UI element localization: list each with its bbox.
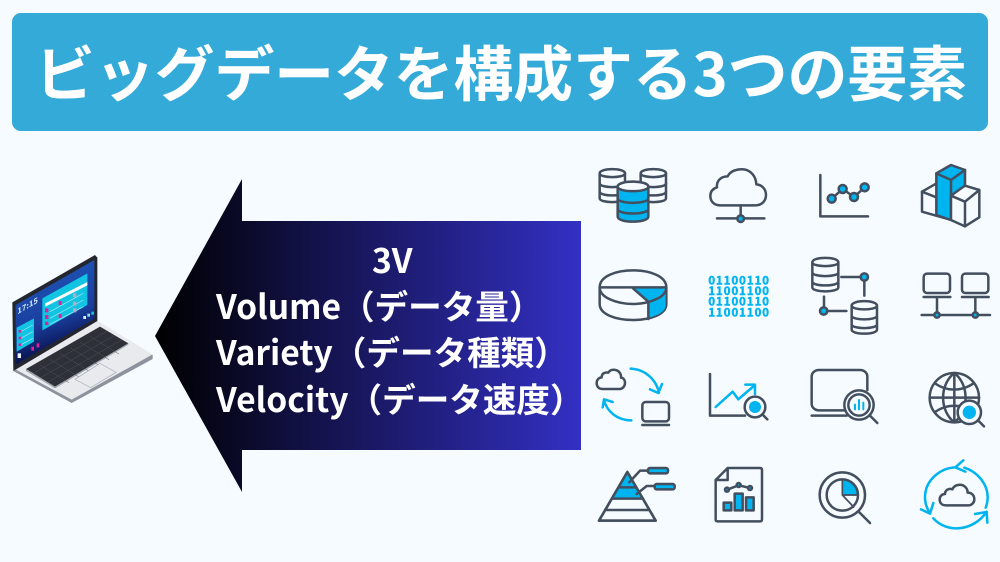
icon: network computers bbox=[922, 274, 990, 318]
icon: cloud cycle bbox=[921, 460, 988, 528]
icon: databases bbox=[600, 169, 666, 222]
icon: report document bbox=[716, 468, 762, 521]
icon: 3D blocks bbox=[922, 165, 979, 226]
3V text block: Volume（データ量） bbox=[215, 280, 542, 329]
icon: pyramid bbox=[599, 468, 675, 521]
title: ビッグデータを構成する3つの要素 bbox=[35, 27, 967, 114]
3V text block bbox=[215, 234, 584, 422]
icon: cloud network bbox=[710, 169, 766, 222]
icon: binary digits: 01100110 bbox=[708, 293, 769, 309]
icon: trend chart with magnifier bbox=[710, 374, 767, 419]
icon: cloud and computer sync bbox=[597, 369, 669, 425]
icon: laptop bbox=[12, 255, 153, 403]
icon: binary digits: 11001100 bbox=[708, 283, 769, 299]
title banner bbox=[12, 13, 988, 131]
clock: 17:15 bbox=[17, 294, 38, 317]
icon: binary digits bbox=[708, 273, 769, 320]
3V text block: Velocity（データ速度） bbox=[215, 373, 584, 422]
icon: 3D pie chart bbox=[600, 270, 666, 320]
icon: binary digits: 01100110 bbox=[708, 273, 769, 289]
3V text block: Variety（データ種類） bbox=[215, 326, 568, 375]
icon: binary digits: 11001100 bbox=[708, 304, 769, 320]
arrow pointing to laptop bbox=[155, 179, 584, 492]
3V text block: 3V bbox=[372, 234, 413, 283]
icon: laptop search bbox=[812, 370, 877, 423]
icon: line chart bbox=[820, 175, 869, 216]
icon: globe search bbox=[930, 373, 984, 426]
icon: connected databases bbox=[812, 258, 877, 334]
icon: pie search bbox=[820, 472, 870, 523]
